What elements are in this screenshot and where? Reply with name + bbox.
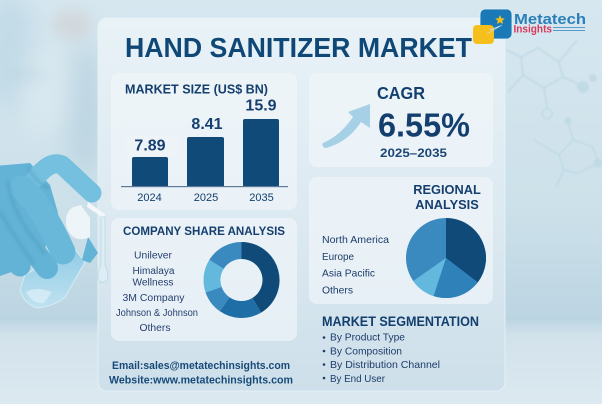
legend: regions: Europe	[322, 251, 354, 263]
bar chart: 15.9	[245, 98, 277, 114]
panel: regional analysis	[309, 177, 493, 304]
panel: market size	[111, 73, 297, 210]
donut chart	[212, 250, 271, 310]
legend: regions: Others	[322, 284, 353, 296]
heading: market segmentation: MARKET SEGMENTATION	[322, 314, 479, 329]
bar chart: 8.41	[191, 116, 223, 133]
bar chart: 7.89	[134, 138, 166, 154]
bar chart: 2024	[137, 192, 162, 204]
icon: gloved hand	[0, 163, 92, 276]
molecule pattern	[506, 40, 602, 187]
bar chart: 2035	[249, 192, 274, 204]
list: segments: By Product Type	[330, 332, 405, 344]
pie chart	[406, 218, 486, 298]
list: segments: By Composition	[330, 346, 402, 358]
heading: regional analysis: ANALYSIS	[415, 197, 479, 212]
heading: company share analysis: COMPANY SHARE ANALYSIS	[123, 224, 285, 238]
heading: CAGR: CAGR	[377, 83, 425, 103]
panel: CAGR	[309, 73, 493, 167]
legend: companies: Wellness	[132, 278, 174, 288]
period: 2025–2035: 2025–2035	[380, 146, 447, 160]
legend: companies	[116, 250, 198, 334]
list: segments: By End User	[330, 373, 385, 385]
heading: market size: MARKET SIZE (US$ BN)	[125, 82, 268, 96]
contact details: Email:sales@metatechinsights.com	[112, 360, 290, 372]
icon: sanitizer bottle	[20, 202, 108, 308]
legend: companies: Johnson & Johnson	[116, 308, 198, 319]
bar chart: 2025	[194, 192, 218, 204]
market segmentation	[322, 314, 479, 385]
legend: companies: Others	[140, 323, 170, 334]
legend: regions	[322, 234, 389, 296]
logo: Metatech Insights: Insights	[514, 24, 552, 36]
heading: regional analysis: REGIONAL	[413, 182, 481, 197]
arrow: growth	[322, 104, 370, 148]
hand in blue glove holding sanitizer bottle	[0, 163, 108, 308]
contact details: Website:www.metatechinsights.com	[109, 374, 293, 386]
panel: company share analysis	[111, 218, 297, 341]
legend: companies: 3M Company	[122, 293, 184, 304]
bar chart	[121, 96, 290, 204]
logo: Metatech Insights: Metatech	[514, 12, 586, 28]
legend: regions: North America	[322, 234, 389, 246]
value: CAGR percentage: 6.55%	[378, 106, 470, 144]
legend: companies: Unilever	[134, 250, 173, 262]
logo: Metatech Insights	[473, 9, 586, 44]
legend: companies: Himalaya	[132, 266, 175, 277]
list: segments	[323, 332, 440, 385]
main panel	[98, 18, 505, 391]
list: segments: By Distribution Channel	[330, 359, 440, 371]
title: HAND SANITIZER MARKET	[125, 32, 472, 63]
contact details	[109, 360, 293, 386]
legend: regions: Asia Pacific	[322, 268, 375, 280]
